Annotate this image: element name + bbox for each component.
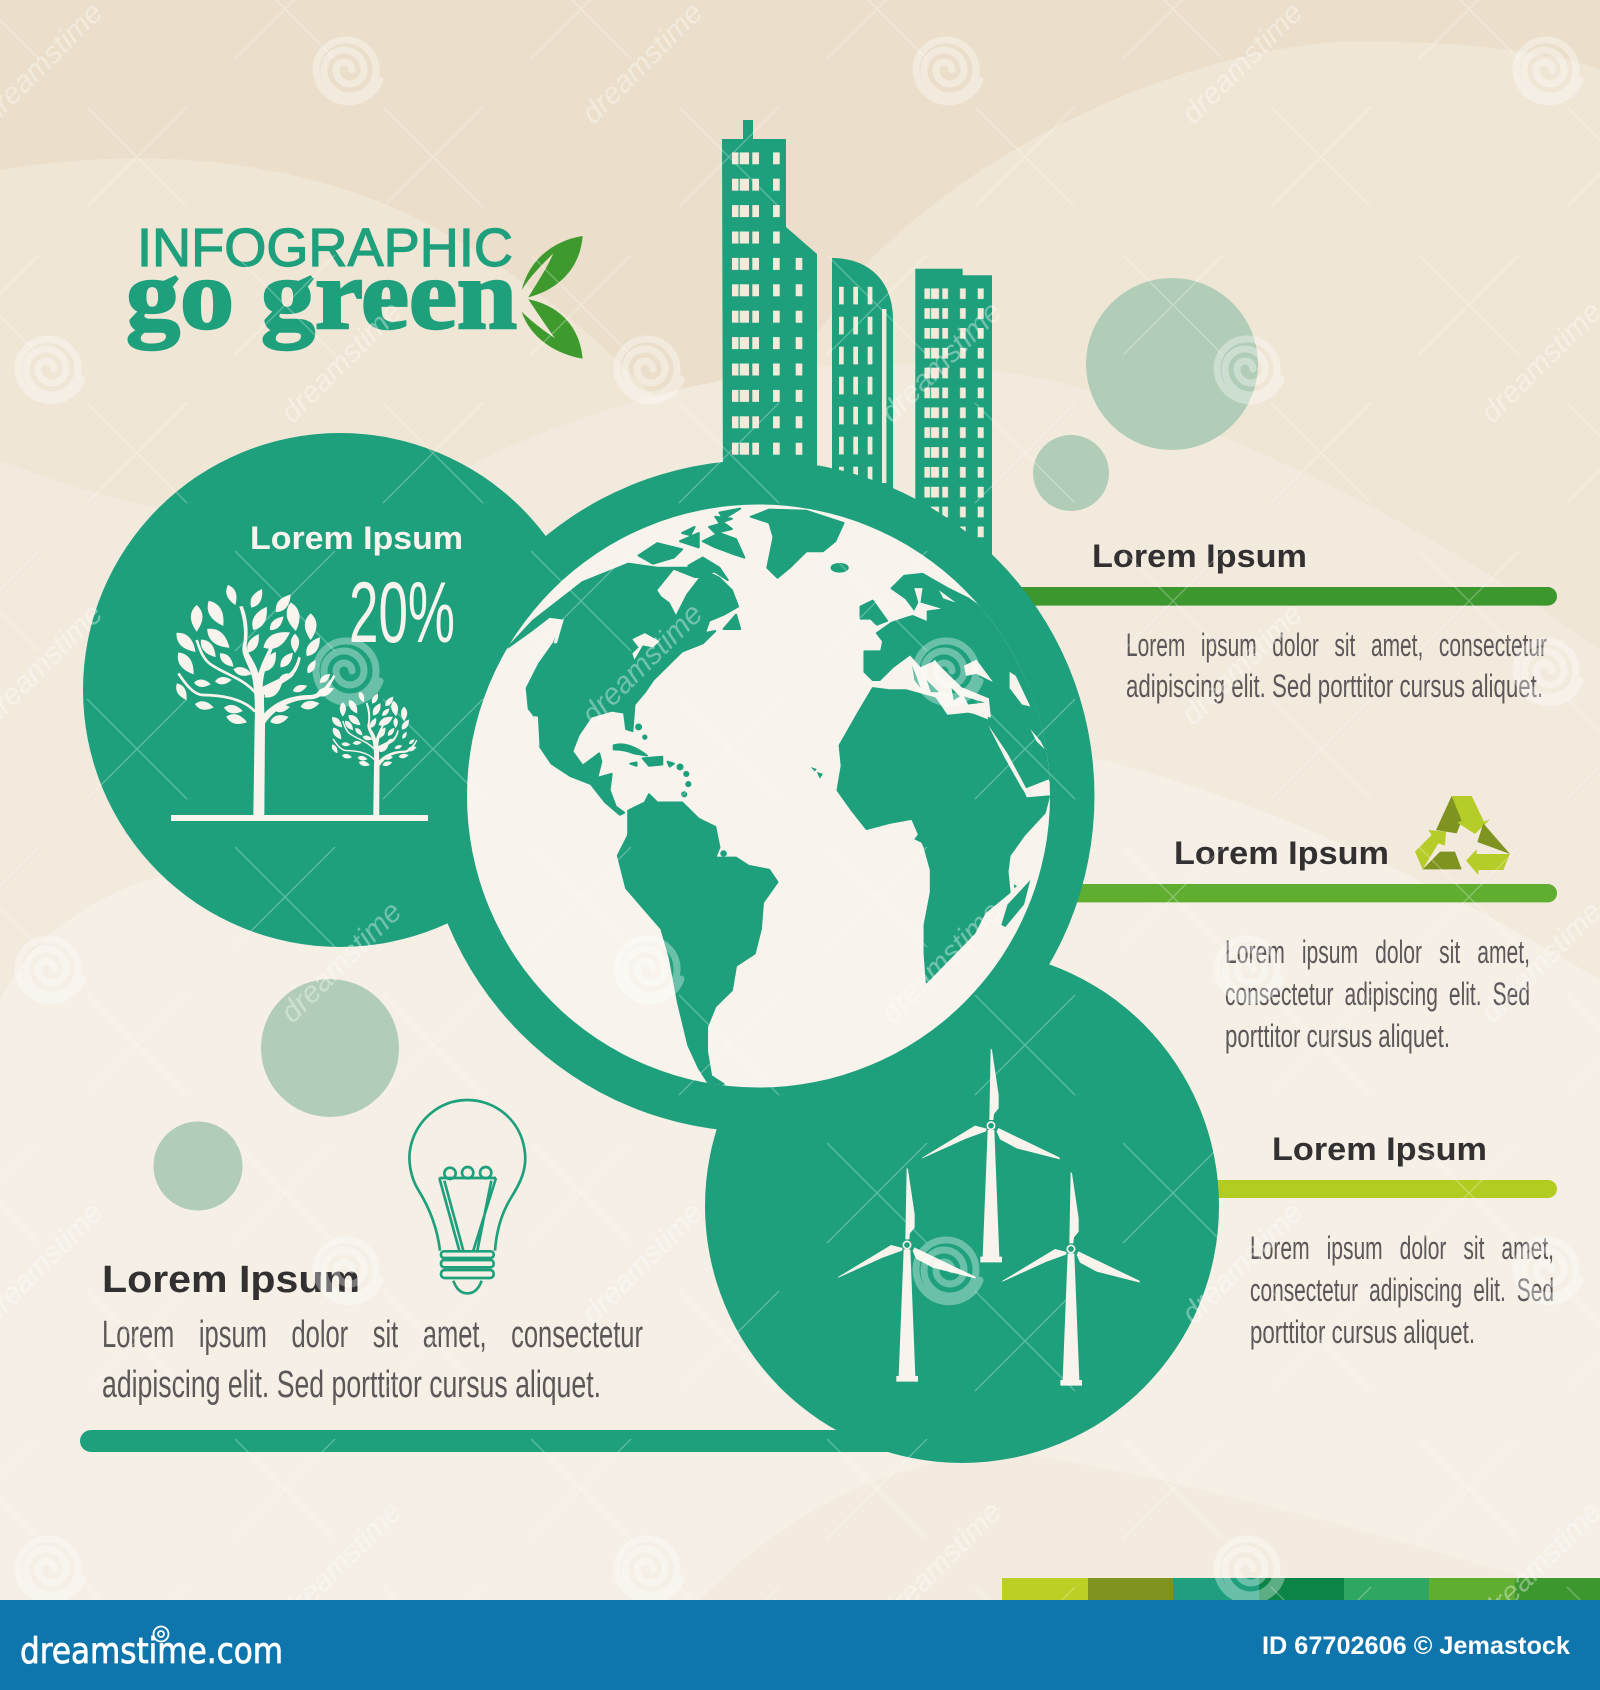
building: tall tower: [722, 120, 817, 520]
building: stepped tower: [915, 269, 992, 560]
greenland and iceland: [751, 509, 887, 625]
paragraph: lower left: [102, 1314, 643, 1406]
eurasia: [864, 574, 1049, 792]
watermark: dreamstime: [1175, 0, 1309, 130]
globe ring: [422, 460, 1094, 1132]
watermark: dreamstime: [874, 1495, 1008, 1629]
text block: right bottom: [1250, 1131, 1554, 1350]
panel: wind circle: [705, 949, 1219, 1463]
text block: lower left: [102, 1259, 643, 1406]
buildings: [722, 120, 992, 560]
icon: left turbine: [838, 1168, 976, 1382]
icon: small tree: [330, 691, 417, 815]
watermark: dreamstime: [1175, 597, 1309, 731]
percentage: 20%: [349, 565, 455, 661]
icon: recycle: [1415, 796, 1510, 875]
icon: light bulb: [409, 1100, 525, 1293]
watermark: dreamstime: [1175, 1196, 1309, 1330]
africa: [838, 688, 1049, 982]
text block: right middle: [1174, 835, 1530, 1054]
panel: trees circle: [83, 433, 597, 947]
mediterranean islands: [912, 666, 985, 705]
madagascar and atlantic islands: [720, 767, 1030, 927]
color strip: [1002, 1578, 1600, 1600]
watermark: dreamstime: [274, 895, 408, 1029]
globe disc: [467, 504, 1050, 1088]
decorative circle: lower left large: [261, 979, 399, 1117]
watermark: dreamstime: [274, 1495, 408, 1629]
title: [126, 218, 583, 359]
heading: right middle: Lorem Ipsum: [1174, 835, 1389, 871]
text block: right top: [1092, 538, 1547, 704]
south america: [618, 794, 777, 1084]
north america: [508, 509, 744, 815]
paragraph: right middle: [1225, 934, 1530, 1054]
globe edge arc: [1022, 672, 1046, 748]
ground line: [171, 815, 428, 821]
heading: trees circle: Lorem Ipsum: [250, 520, 463, 556]
building: curved tower: [832, 258, 893, 520]
paragraph: right middle: porttitor cursus aliquet.: [1225, 1018, 1450, 1054]
bar: right middle: [1040, 884, 1557, 902]
bar: right bottom: [1180, 1180, 1557, 1198]
heading: right bottom: Lorem Ipsum: [1272, 1131, 1487, 1167]
footer: [0, 1600, 1600, 1690]
paragraph: right bottom: [1250, 1230, 1554, 1350]
icon: leaves: [522, 236, 583, 359]
decorative circle: lower left small: [154, 1122, 242, 1210]
heading: lower left: Lorem Ipsum: [102, 1259, 360, 1301]
bar: right top: [1000, 587, 1557, 606]
trees circle content: [171, 520, 463, 821]
watermark: dreamstime: [575, 0, 709, 130]
icon: wind turbines: [838, 1048, 1140, 1386]
icon: large tree: [172, 583, 335, 815]
icon: trees: [171, 583, 428, 821]
title line: go green: go green: [126, 239, 517, 350]
decorative circle: top right small: [1033, 435, 1109, 511]
title line: infographic: INFOGRAPHIC: [137, 218, 513, 278]
icon: right turbine: [1002, 1172, 1140, 1386]
paragraph: right bottom: porttitor cursus aliquet.: [1250, 1314, 1475, 1350]
watermark: dreamstime: [274, 295, 408, 429]
bar: lower left: [80, 1430, 940, 1452]
footer logo: dreamstime.com: [20, 1631, 283, 1672]
watermark: dreamstime: [575, 1196, 709, 1330]
paragraph: right top: [1126, 627, 1547, 704]
paragraph: lower left: adipiscing elit. Sed porttitor cursus aliquet.: [102, 1364, 601, 1406]
footer credit: ID 67702606 © Jemastock: [1262, 1632, 1570, 1660]
watermark: dreamstime: [874, 295, 1008, 429]
inland seas: [875, 588, 1049, 796]
decorative circle: top right large: [1086, 278, 1258, 450]
watermark: dreamstime: [575, 597, 709, 731]
paragraph: lower left: Lorem ipsum dolor sit amet, consectetur: [102, 1314, 643, 1356]
heading: right top: Lorem Ipsum: [1092, 538, 1307, 574]
globe continents: [508, 509, 1049, 1084]
north america inland water: [534, 570, 699, 747]
watermark: dreamstime: [874, 895, 1008, 1029]
footer logo spiral: [154, 1626, 168, 1642]
icon: center turbine: [922, 1048, 1060, 1262]
globe: [422, 460, 1094, 1132]
